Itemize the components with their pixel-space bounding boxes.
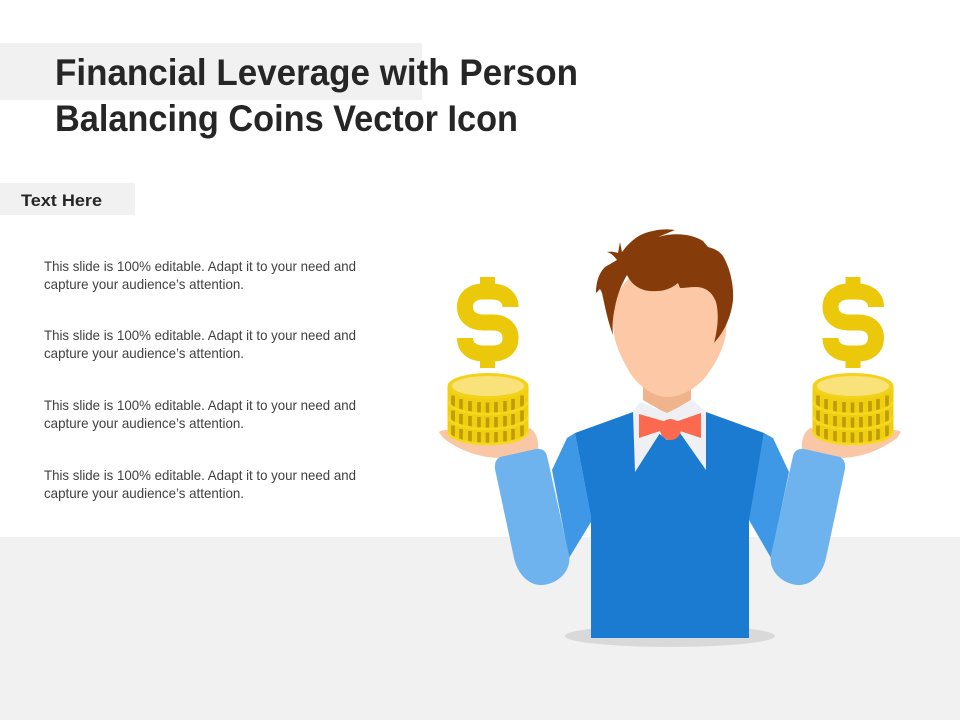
title: Financial Leverage with Person [55,52,578,93]
right upper arm [749,433,789,558]
left dollar sign [465,277,510,368]
icon: person balancing coins [439,229,901,647]
text block 4: This slide is 100% editable. Adapt it to your need and [44,467,356,483]
text block 3: capture your audience’s attention. [44,415,244,431]
ground shadow [565,625,775,647]
hair [596,229,733,343]
right forearm sleeve [771,449,845,585]
text block 4: capture your audience’s attention. [44,485,244,501]
right dollar sign [830,277,876,368]
right coin stack [812,373,894,444]
left forearm sleeve [495,449,569,585]
vest [575,412,764,638]
left hand [439,428,538,458]
floor band [0,537,960,720]
title: Balancing Coins Vector Icon [55,98,518,139]
shirt collar [633,400,706,472]
text block 1: This slide is 100% editable. Adapt it to your need and [44,258,356,274]
text block 1: capture your audience’s attention. [44,276,244,292]
neck [643,380,691,414]
text block 4 [44,467,356,501]
face [613,265,726,397]
bow tie [639,413,701,440]
text block 1 [44,258,356,292]
left coin stack [448,373,528,444]
right hand [802,428,901,458]
left upper arm [552,433,591,558]
title [55,52,578,139]
text block 3 [44,397,356,431]
title highlight band [0,43,422,100]
text block 3: This slide is 100% editable. Adapt it to your need and [44,397,356,413]
subheading: Text Here: Text Here [21,191,102,210]
text block 2: This slide is 100% editable. Adapt it to your need and [44,327,356,343]
text block 2 [44,327,356,361]
text block 2: capture your audience’s attention. [44,345,244,361]
subheading: Text Here [0,183,135,215]
